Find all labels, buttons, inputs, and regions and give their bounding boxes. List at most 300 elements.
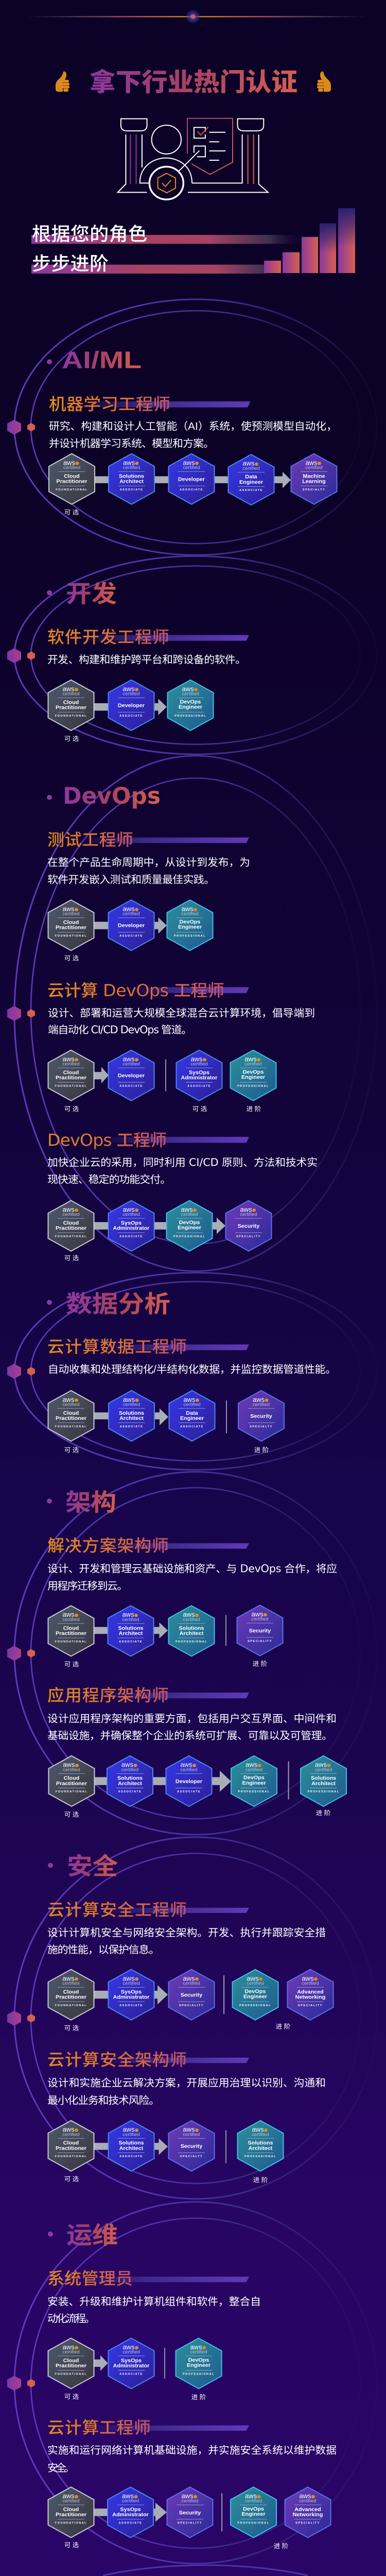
description <box>47 2445 337 2474</box>
badge: Security: certified <box>240 1212 257 1217</box>
badge: DevOps Engineer: aws <box>245 1761 257 1769</box>
badge: Security: aws <box>251 1610 264 1618</box>
badge: Solutions Architect professional: aws <box>252 2126 264 2133</box>
badge: DevOps Engineer: aws <box>245 2492 257 2500</box>
description <box>47 1713 337 1741</box>
badge: DevOps Engineer: aws <box>181 1206 193 1213</box>
badge: Solutions Architect associate: certified <box>122 2132 140 2137</box>
certification path: software engineer <box>48 680 213 742</box>
badge: Security: certified <box>183 1981 200 1986</box>
badge: Security: aws <box>240 1206 252 1213</box>
badge: Data Engineer: Data <box>186 1410 198 1416</box>
section heading: data analytics: 数据分析 <box>66 1291 170 1317</box>
badge: Solutions Architect professional: aws <box>183 1611 195 1618</box>
badge: SysOps Administrator: SysOps <box>121 1989 142 1995</box>
badge: Solutions Architect associate: ASSOCIATE <box>119 2155 143 2158</box>
badge: Developer: aws <box>122 1055 135 1063</box>
description: 加快企业云的采用，同时利用 CI/CD 原则、方法和技术实 <box>47 1156 318 1168</box>
badge: Security: Security <box>181 2143 202 2149</box>
badge: Security: SPECIALITY <box>179 2004 204 2007</box>
top divider line with glowing dot <box>26 9 368 24</box>
badge: Solutions Architect professional: PROFESSIONAL <box>244 2155 276 2158</box>
badge: Solutions Architect professional: Architect <box>311 1781 336 1787</box>
badge: Cloud Practitioner: aws <box>62 2343 75 2351</box>
certification path: solutions architect <box>48 1605 283 1668</box>
job title: application architect: 应用程序架构师 <box>47 1686 169 1704</box>
badge: SysOps Administrator: Administrator <box>113 2363 149 2369</box>
badge: DevOps Engineer: DevOps <box>243 1775 265 1781</box>
badge: Security: certified <box>253 1402 270 1407</box>
badge: SysOps Administrator: aws <box>122 2343 135 2351</box>
badge: DevOps Engineer: aws <box>247 1975 259 1982</box>
badge: Cloud Practitioner: Cloud <box>64 473 80 479</box>
badge: Developer: certified <box>122 1061 140 1066</box>
badge: Solutions Architect: ASSOCIATE <box>120 488 143 492</box>
badge: Cloud Practitioner <box>48 1200 94 1251</box>
badge: Cloud Practitioner: FOUNDATIONAL <box>55 1425 87 1428</box>
section heading: architecture: 架构 <box>65 1489 116 1516</box>
certification path: cloud DevOps engineer <box>48 1050 276 1113</box>
label: optional: 可 选 <box>64 2541 79 2549</box>
badge: Developer: aws <box>122 685 135 692</box>
badge: Developer: certified <box>122 691 140 697</box>
badge: DevOps Engineer: DevOps <box>180 699 201 705</box>
badge: Data Engineer: certified <box>183 1402 201 1407</box>
description: 实施和运行网络计算机基础设施，并实施安全系统以维护数据 <box>47 2445 337 2456</box>
panel: operations section <box>47 2222 337 2550</box>
description <box>49 420 337 450</box>
description: 自动收集和处理结构化/半结构化数据，并监控数据管道性能。 <box>48 1364 336 1375</box>
badge: DevOps Engineer: DevOps <box>180 919 200 925</box>
badge: Solutions Architect professional: certified <box>183 1617 200 1622</box>
job ribbon: cloud engineer <box>87 2426 249 2431</box>
badge: Cloud Practitioner: Cloud <box>63 2506 79 2513</box>
badge: Cloud Practitioner: certified <box>62 911 80 917</box>
description: 施的性能，以保护信息。 <box>47 1944 160 1956</box>
badge: SysOps Administrator: aws <box>190 1055 203 1063</box>
badge: Cloud Practitioner: FOUNDATIONAL <box>55 2004 87 2007</box>
description: 软件开发嵌入测试和质量最佳实践。 <box>47 874 215 886</box>
badge: Cloud Practitioner: Practitioner <box>56 1225 86 1231</box>
section heading: AI/ML: AI/ML <box>62 347 142 374</box>
badge: SysOps Administrator: SysOps <box>121 2358 142 2364</box>
description: 研究、构建和设计人工智能（AI）系统，使预测模型自动化， <box>49 420 337 432</box>
label: advanced: 进 阶 <box>254 1447 269 1453</box>
badge: DevOps Engineer: DevOps <box>245 1988 266 1994</box>
description: 在整个产品生命周期中，从设计到发布，为 <box>47 857 250 868</box>
icon: thumbs up left <box>56 72 69 92</box>
badge: DevOps Engineer: certified <box>190 2349 207 2354</box>
badge: Cloud Practitioner: aws <box>62 2492 75 2500</box>
badge: Solutions Architect professional: Solutions <box>248 2140 273 2146</box>
badge: Cloud Practitioner <box>48 1756 95 1806</box>
heading: by role, step by step <box>31 224 302 274</box>
badge: Cloud Practitioner: certified <box>62 2132 80 2137</box>
badge: Security <box>237 1605 283 1656</box>
badge: Cloud Practitioner: FOUNDATIONAL <box>55 1235 87 1238</box>
badge: Cloud Practitioner: certified <box>62 1617 80 1622</box>
badge: DevOps Engineer <box>233 1970 278 2020</box>
badge: Machine Learning: SPECIALTY <box>303 488 325 492</box>
label: optional: 可 选 <box>64 2025 79 2031</box>
badge: DevOps Engineer: PROFESSIONAL <box>239 2004 271 2007</box>
badge: Cloud Practitioner: Practitioner <box>56 2145 86 2151</box>
badge: SysOps Administrator <box>108 1970 154 2020</box>
badge: Developer: Developer <box>176 1778 202 1785</box>
badge: SysOps Administrator: Administrator <box>181 1075 217 1081</box>
badge: Advanced Networking: Networking <box>293 2512 323 2518</box>
badge: SysOps Administrator: certified <box>122 2349 140 2354</box>
badge: Security: SPECIALITY <box>236 1235 261 1238</box>
label: optional: 可 选 <box>64 2393 79 2400</box>
description <box>47 2077 326 2106</box>
job title: system administrator: 系统管理员 <box>47 2269 133 2287</box>
badge: Data Engineer: aws <box>183 1396 196 1403</box>
job ribbon: cloud data engineer <box>103 1345 249 1350</box>
badge: Solutions Architect: Solutions <box>119 473 144 479</box>
badge: Cloud Practitioner: Cloud <box>63 1625 79 1631</box>
rising step bars <box>264 208 355 273</box>
badge: Solutions Architect: Architect <box>119 479 144 484</box>
badge: Solutions Architect associate: aws <box>122 2126 135 2133</box>
section heading: DevOps: DevOps <box>63 783 161 809</box>
badge: DevOps Engineer: DevOps <box>243 2506 264 2512</box>
badge: SysOps Administrator: ASSOCIATE <box>119 2373 143 2376</box>
badge: Cloud Practitioner: FOUNDATIONAL <box>55 1640 87 1643</box>
badge: Developer: aws <box>180 1761 192 1769</box>
badge: Security: certified <box>181 2498 199 2503</box>
badge: Solutions Architect associate: Solutions <box>118 2140 144 2146</box>
badge: Developer <box>166 1756 212 1806</box>
badge: Cloud Practitioner: Practitioner <box>56 2363 86 2369</box>
badge: Cloud Practitioner: Practitioner <box>56 2512 86 2518</box>
label: advanced: 进 阶 <box>276 2023 290 2030</box>
badge: Solutions Architect professional: Architect <box>249 2145 273 2151</box>
badge: Cloud Practitioner <box>49 454 95 504</box>
badge: Cloud Practitioner: FOUNDATIONAL <box>55 935 87 938</box>
badge: Cloud Practitioner: certified <box>63 465 80 470</box>
badge: Cloud Practitioner: Practitioner <box>57 479 87 484</box>
description: 安全。 <box>47 2462 75 2474</box>
badge: SysOps Administrator: Administrator <box>113 1225 149 1231</box>
badge: Solutions Architect: aws <box>123 1396 135 1403</box>
badge: Solutions Architect professional: certified <box>315 1767 332 1772</box>
badge: Cloud Practitioner: Cloud <box>63 1989 79 1995</box>
badge: DevOps Engineer: certified <box>182 691 199 697</box>
description: 端自动化 CI/CD DevOps 管道。 <box>48 1024 192 1036</box>
job ribbon: test engineer <box>77 838 249 843</box>
badge: SysOps Administrator: aws <box>122 2492 134 2500</box>
badge: Cloud Practitioner: FOUNDATIONAL <box>56 1790 87 1793</box>
badge: SysOps Administrator: ASSOCIATE <box>187 1085 211 1088</box>
description <box>47 1156 318 1185</box>
badge: Advanced Networking: SPECIALITY <box>295 2522 320 2524</box>
job title: cloud security engineer: 云计算安全工程师 <box>47 1901 187 1919</box>
badge: Cloud Practitioner: FOUNDATIONAL <box>55 2522 87 2524</box>
label: optional: 可 选 <box>64 1255 79 1262</box>
badge: SysOps Administrator: SysOps <box>121 1220 142 1226</box>
badge: Developer: ASSOCIATE <box>177 1790 201 1793</box>
description: 最小化业务和技术风险。 <box>47 2095 160 2106</box>
badge: DevOps Engineer: certified <box>244 1061 262 1066</box>
job ribbon: cloud security engineer <box>103 1908 249 1913</box>
description <box>47 2296 261 2325</box>
badge: Data Engineer: Engineer <box>180 1415 204 1421</box>
badge: Cloud Practitioner: Practitioner <box>56 1415 86 1421</box>
badge: Solutions Architect associate: Architect <box>118 1781 142 1787</box>
badge: Solutions Architect: certified <box>123 1402 140 1407</box>
label: optional: 可 选 <box>64 1811 79 1818</box>
badge: Solutions Architect: ASSOCIATE <box>120 1425 143 1428</box>
description <box>48 1007 315 1036</box>
badge: Solutions Architect associate: aws <box>122 1611 134 1618</box>
description: 动化流程。 <box>47 2313 95 2325</box>
badge: Cloud Practitioner: Cloud <box>63 1070 79 1076</box>
badge: Security: aws <box>183 2126 195 2133</box>
badge: Security: SPECIALITY <box>178 2522 202 2524</box>
heading line 1: 根据您的角色 <box>32 224 147 244</box>
certification path: test engineer <box>48 900 213 962</box>
badge: Cloud Practitioner: aws <box>62 685 75 692</box>
badge: Cloud Practitioner: Cloud <box>63 2140 79 2146</box>
description: 用程序迁移到云。 <box>47 1580 128 1592</box>
badge: Solutions Architect: Architect <box>119 1415 144 1421</box>
badge: DevOps Engineer: Engineer <box>241 2511 266 2517</box>
badge: DevOps Engineer: Engineer <box>243 1994 267 1999</box>
badge: DevOps Engineer <box>231 1050 276 1100</box>
badge: DevOps Engineer: PROFESSIONAL <box>237 2522 270 2524</box>
certification path: cloud engineer <box>48 2487 330 2550</box>
certification path: machine learning <box>49 454 337 516</box>
job ribbon: solutions architect <box>103 1543 249 1549</box>
badge: SysOps Administrator <box>176 1050 222 1100</box>
badge: Solutions Architect professional: certified <box>252 2132 269 2137</box>
badge: Advanced Networking <box>285 2487 330 2537</box>
label: optional: 可 选 <box>64 509 79 516</box>
badge: DevOps Engineer: aws <box>244 1055 257 1063</box>
badge: Security: Security <box>179 2510 201 2516</box>
badge: Cloud Practitioner: aws <box>62 1611 75 1618</box>
badge: Solutions Architect professional <box>238 2121 283 2171</box>
badge: Solutions Architect associate: Architect <box>119 2145 144 2151</box>
badge: Developer: ASSOCIATE <box>119 935 143 938</box>
badge: SysOps Administrator: Administrator <box>112 2512 149 2518</box>
description <box>47 1563 337 1592</box>
badge: SysOps Administrator: certified <box>122 1212 140 1217</box>
badge: Cloud Practitioner: aws <box>62 1206 75 1213</box>
section heading: operations: 运维 <box>66 2222 118 2248</box>
badge: Cloud Practitioner <box>48 2487 94 2537</box>
badge: Security: SPECIALTY <box>180 2155 203 2158</box>
badge: Advanced Networking <box>287 1970 334 2020</box>
badge: DevOps Engineer <box>167 900 213 951</box>
description: 设计计算机安全与网络安全架构。开发、执行并跟踪安全措 <box>47 1927 326 1939</box>
badge: Security: Security <box>238 1223 259 1229</box>
badge: Solutions Architect associate: Solutions <box>117 1775 143 1782</box>
badge: Data Engineer: aws <box>242 460 255 467</box>
badge: Cloud Practitioner: aws <box>63 459 75 466</box>
badge: Data Engineer: Engineer <box>239 479 263 485</box>
badge: Machine Learning <box>291 454 337 504</box>
badge: Solutions Architect professional <box>301 1756 346 1806</box>
label: optional: 可 选 <box>192 1106 207 1113</box>
badge: SysOps Administrator: certified <box>190 1061 208 1066</box>
badge: Security: aws <box>183 1975 195 1982</box>
badge: Developer: ASSOCIATE <box>180 488 203 492</box>
badge: DevOps Engineer <box>168 680 213 731</box>
label: advanced: 进 阶 <box>191 2394 206 2401</box>
badge: Security <box>225 1200 272 1251</box>
job title: cloud data engineer: 云计算数据工程师 <box>47 1338 187 1356</box>
job title: solutions architect: 解决方案架构师 <box>47 1536 169 1555</box>
section heading: security: 安全 <box>67 1853 118 1879</box>
badge: Solutions Architect professional: PROFESSIONAL <box>307 1790 340 1793</box>
description: 设计和实施企业云解决方案，开展应用治理以识别、沟通和 <box>47 2077 326 2089</box>
badge: Security: certified <box>251 1617 269 1621</box>
job title: DevOps engineer: DevOps 工程师 <box>47 1131 167 1150</box>
badge: Cloud Practitioner: FOUNDATIONAL <box>55 2373 87 2376</box>
panel: DevOps section <box>47 783 318 1262</box>
badge: DevOps Engineer: PROFESSIONAL <box>173 1235 205 1238</box>
badge: DevOps Engineer <box>176 2338 221 2388</box>
badge: SysOps Administrator: ASSOCIATE <box>119 1235 143 1238</box>
description: 设计、部署和运营大规模全球混合云计算环境，倡导端到 <box>48 1007 315 1019</box>
description <box>47 1927 326 1956</box>
badge: Cloud Practitioner: certified <box>63 1767 80 1772</box>
description: 并设计机器学习系统、模型和方案。 <box>49 438 214 450</box>
badge: Security <box>238 1391 284 1441</box>
job ribbon: cloud security architect <box>103 2058 249 2063</box>
job title: cloud engineer: 云计算工程师 <box>47 2419 151 2437</box>
badge: Security <box>169 1970 214 2020</box>
badge: DevOps Engineer: certified <box>181 911 199 917</box>
badge: SysOps Administrator: SysOps <box>120 2506 141 2513</box>
badge: Cloud Practitioner: Practitioner <box>56 1781 87 1787</box>
badge: Solutions Architect associate: Solutions <box>118 1625 144 1631</box>
certification path: application architect <box>48 1756 346 1818</box>
badge: Solutions Architect associate: Architect <box>119 1631 143 1636</box>
badge: Advanced Networking: aws <box>299 2492 311 2500</box>
badge: Developer: ASSOCIATE <box>119 1085 143 1088</box>
badge: Developer: aws <box>122 905 135 912</box>
badge: Cloud Practitioner: Practitioner <box>56 1631 86 1636</box>
badge: Security: Security <box>250 1413 272 1419</box>
orbit nodes: hexagon markers <box>7 420 35 2391</box>
badge: DevOps Engineer: PROFESSIONAL <box>183 2373 215 2376</box>
badge: Cloud Practitioner: Practitioner <box>56 1075 86 1081</box>
badge: Solutions Architect associate: aws <box>121 1761 133 1769</box>
badge: Cloud Practitioner: aws <box>62 2126 75 2133</box>
badge: Cloud Practitioner: Cloud <box>63 1220 79 1226</box>
certification path: system administrator <box>48 2338 221 2401</box>
heading bar 2 <box>31 265 265 274</box>
badge: Developer: Developer <box>118 923 145 929</box>
badge: SysOps Administrator <box>108 2487 153 2537</box>
badge: SysOps Administrator <box>108 2338 154 2388</box>
badge: Advanced Networking: Advanced <box>297 1989 324 1995</box>
badge: Solutions Architect <box>109 454 154 504</box>
badge: Cloud Practitioner: certified <box>62 1061 80 1066</box>
badge: Developer: certified <box>180 1767 198 1772</box>
badge: Security: aws <box>253 1396 265 1403</box>
badge: Solutions Architect associate <box>108 2121 154 2171</box>
label: optional: 可 选 <box>64 2176 79 2182</box>
badge: Cloud Practitioner: FOUNDATIONAL <box>55 2155 87 2158</box>
badge: Advanced Networking: aws <box>302 1975 314 1982</box>
job title: cloud DevOps engineer: 云计算 DevOps 工程师 <box>47 981 224 1000</box>
badge: DevOps Engineer: aws <box>190 2343 202 2351</box>
badge: SysOps Administrator: aws <box>122 1206 135 1213</box>
description: 开发、构建和维护跨平台和跨设备的软件。 <box>47 654 246 666</box>
badge: Solutions Architect associate <box>108 1606 153 1656</box>
badge: Cloud Practitioner: FOUNDATIONAL <box>55 715 87 718</box>
badge: Security: certified <box>183 2132 200 2137</box>
badge: Developer: certified <box>122 911 140 917</box>
job ribbon: application architect <box>103 1692 249 1698</box>
icon: thumbs up right <box>317 72 331 92</box>
description: 设计、开发和管理云基础设施和资产、与 DevOps 合作，将应 <box>47 1563 337 1575</box>
badge: Cloud Practitioner: aws <box>62 905 75 912</box>
badge: DevOps Engineer: DevOps <box>179 1219 200 1226</box>
badge: Cloud Practitioner: Cloud <box>63 1410 79 1416</box>
badge: Cloud Practitioner: aws <box>62 1975 75 1982</box>
illustration: certified person with checklist between columns <box>118 118 268 199</box>
badge: DevOps Engineer: Engineer <box>178 1225 201 1231</box>
description: 现快速、稳定的功能交付。 <box>47 1174 171 1185</box>
badge: Cloud Practitioner: aws <box>63 1761 75 1769</box>
badge: SysOps Administrator: SysOps <box>189 1070 209 1076</box>
badge: DevOps Engineer: certified <box>181 1212 198 1217</box>
label: optional: 可 选 <box>64 1106 79 1113</box>
badge: Cloud Practitioner: Practitioner <box>56 1994 86 2000</box>
badge: DevOps Engineer: Engineer <box>178 924 202 930</box>
panel: development section <box>47 581 249 742</box>
badge: Cloud Practitioner: Cloud <box>63 2358 79 2364</box>
heading line 2: 步步进阶 <box>32 253 109 274</box>
badge: DevOps Engineer: DevOps <box>188 2357 209 2363</box>
badge: SysOps Administrator: Administrator <box>113 1994 149 2000</box>
badge: DevOps Engineer <box>167 1200 212 1251</box>
panel: AI/ML section <box>47 347 337 516</box>
badge: Advanced Networking: SPECIALITY <box>298 2004 323 2007</box>
badge: Data Engineer: ASSOCIATE <box>180 1425 204 1428</box>
badge: DevOps Engineer <box>231 1756 277 1806</box>
badge: Solutions Architect associate: certified <box>122 1617 139 1622</box>
label: advanced: 进 阶 <box>253 2176 268 2183</box>
job ribbon: software engineer <box>77 635 249 641</box>
badge: DevOps Engineer: PROFESSIONAL <box>174 715 206 718</box>
badge: Developer <box>108 1050 154 1100</box>
badge: DevOps Engineer: PROFESSIONAL <box>238 1790 270 1793</box>
job ribbon: system administrator <box>77 2277 249 2282</box>
section heading: development: 开发 <box>66 581 117 607</box>
badge: Cloud Practitioner <box>48 2121 94 2171</box>
job ribbon: DevOps engineer <box>103 1137 249 1143</box>
badge: Cloud Practitioner: certified <box>62 1981 80 1986</box>
badge: Cloud Practitioner: aws <box>62 1396 75 1403</box>
badge: Solutions Architect professional: Solutions <box>311 1775 336 1782</box>
badge: DevOps Engineer: certified <box>245 2498 262 2503</box>
badge: Developer <box>108 900 154 951</box>
badge: Security: SPECIALITY <box>248 1640 272 1643</box>
panel: architecture section <box>47 1489 346 1818</box>
job title: test engineer: 测试工程师 <box>47 831 133 849</box>
certification path: cloud data engineer <box>48 1391 284 1453</box>
badge: Data Engineer: Data <box>245 474 257 480</box>
badge: Cloud Practitioner <box>48 680 94 731</box>
badge: Solutions Architect professional: PROFESSIONAL <box>176 1640 207 1643</box>
panel: security section <box>47 1853 333 2183</box>
